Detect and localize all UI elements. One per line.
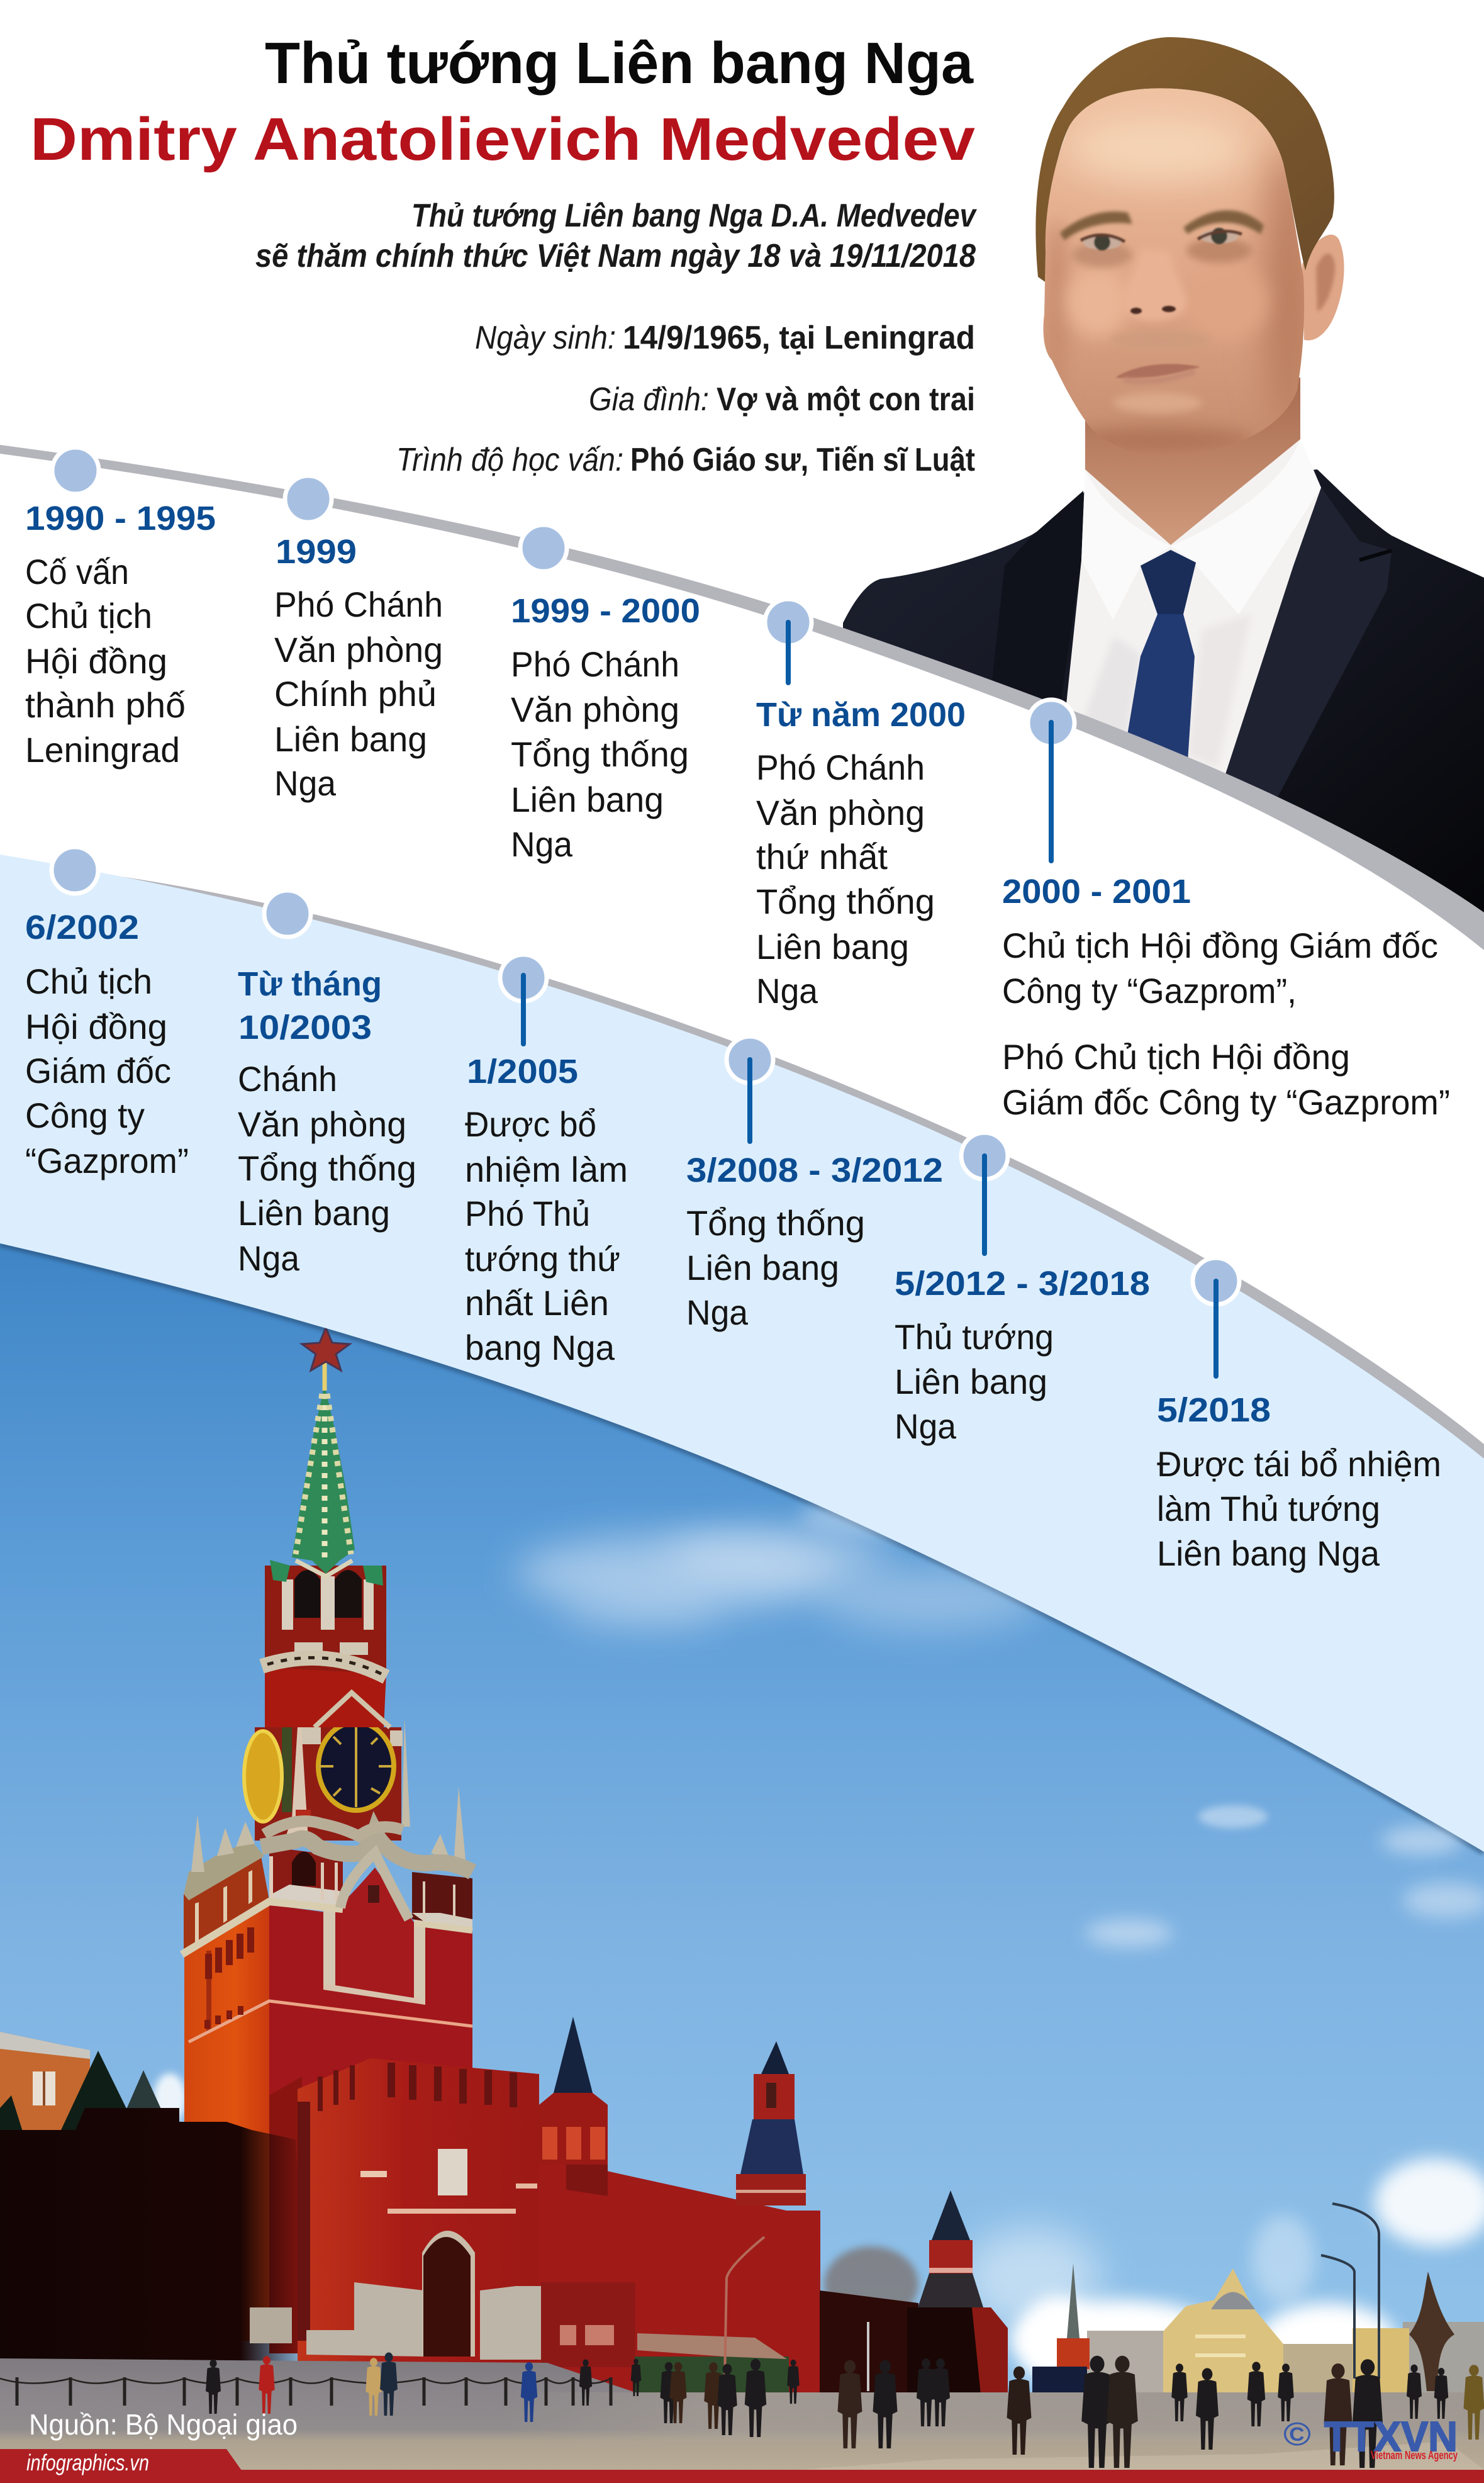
- timeline item 5/2012-3/2018: [895, 1265, 1150, 1446]
- biography facts: 14/9/1965, tại Leningrad: [623, 320, 975, 356]
- timeline item 6/2002: [25, 909, 189, 1180]
- title: Thủ tướng Liên bang Nga: [265, 30, 974, 96]
- timeline item 1999-2000: Nga: [511, 824, 573, 864]
- timeline item 1/2005: 1/2005: [467, 1053, 578, 1090]
- timeline item 1999: Liên bang: [274, 719, 427, 759]
- stone ogee band: [261, 1832, 472, 1872]
- timeline item from 2000: Văn phòng: [756, 793, 925, 832]
- TTXVN logo: ©: [1283, 2416, 1311, 2453]
- timeline item 10/2003: Liên bang: [238, 1193, 390, 1233]
- website label: infographics.vn: [26, 2450, 149, 2475]
- timeline item 1999-2000: Phó Chánh: [511, 644, 679, 684]
- third Kremlin tower: [736, 2041, 806, 2206]
- mausoleum: [635, 2357, 789, 2394]
- curve shadow: [0, 1243, 1484, 1852]
- belfry: [265, 1566, 386, 1674]
- timeline item 2000-2001: 2000 - 2001: [1002, 873, 1191, 911]
- distant city buildings: [1032, 2263, 1484, 2408]
- timeline item 1990-1995: Hội đồng: [25, 641, 167, 681]
- TTXVN logo: TTXVN: [1324, 2413, 1458, 2460]
- timeline item 1/2005: nhất Liên: [465, 1283, 609, 1323]
- timeline item 2000-2001: Chủ tịch Hội đồng Giám đốc: [1002, 926, 1438, 965]
- timeline item 1999: [274, 533, 443, 803]
- timeline item 5/2018: [1157, 1391, 1441, 1573]
- posts and arched panel: [323, 1907, 335, 1987]
- timeline item from 2000: Từ năm 2000: [756, 696, 966, 734]
- timeline item from 2000: Nga: [756, 971, 818, 1011]
- timeline item 2000-2001: Phó Chủ tịch Hội đồng: [1002, 1037, 1350, 1077]
- right ear: [1302, 235, 1344, 340]
- timeline item 10/2003: Từ tháng: [238, 965, 382, 1003]
- biography facts: Phó Giáo sư, Tiến sĩ Luật: [630, 442, 975, 478]
- face: [1043, 88, 1304, 456]
- timeline item 1990-1995: 1990 - 1995: [25, 500, 216, 537]
- hair: [1035, 37, 1334, 283]
- timeline item 5/2018: Được tái bổ nhiệm: [1157, 1444, 1441, 1484]
- right arcade: [412, 1872, 472, 1921]
- timeline item 1999: 1999: [276, 533, 357, 571]
- timeline item from 2000: [756, 696, 966, 1011]
- finial and star: [322, 1359, 327, 1391]
- annex: [541, 2282, 635, 2367]
- dark shadowed wall and trees on the left: [0, 2108, 308, 2366]
- gate arch: [422, 2231, 475, 2357]
- timeline item 1990-1995: Chủ tịch: [25, 596, 152, 636]
- second Kremlin tower: [539, 2017, 608, 2196]
- shirt: [1057, 439, 1321, 799]
- small stone pinnacles: [191, 1718, 466, 1872]
- timeline item 6/2002: Giám đốc: [25, 1051, 171, 1090]
- gold clock face: [244, 1731, 282, 1822]
- timeline item 1999-2000: Tổng thống: [511, 734, 689, 774]
- timeline item 6/2002: “Gazprom”: [25, 1141, 189, 1180]
- suit jacket: [843, 469, 1484, 1007]
- timeline item 1/2005: bang Nga: [465, 1328, 615, 1367]
- timeline item 10/2003: Văn phòng: [238, 1104, 406, 1144]
- timeline item 1999-2000: 1999 - 2000: [511, 592, 700, 630]
- timeline item 1990-1995: Leningrad: [25, 730, 180, 770]
- timeline item 6/2002: Công ty: [25, 1096, 145, 1135]
- collar: [1081, 469, 1171, 620]
- timeline item 2000-2001: [1002, 873, 1450, 1122]
- timeline item 1990-1995: [25, 500, 216, 770]
- subtitle: sẽ thăm chính thức Việt Nam ngày 18 và 19/11/2018: [255, 238, 976, 274]
- sky: [0, 1243, 1484, 2414]
- timeline item 5/2018: làm Thủ tướng: [1157, 1489, 1380, 1528]
- timeline item 1/2005: tướng thứ: [465, 1239, 620, 1279]
- timeline item 1990-1995: thành phố: [25, 685, 186, 725]
- source note: Nguồn: Bộ Ngoại giao: [29, 2408, 298, 2441]
- timeline item 6/2002: Chủ tịch: [25, 961, 152, 1001]
- cornice band: [262, 1658, 386, 1677]
- red Kremlin wall: [250, 2058, 820, 2397]
- Spasskaya tower: [182, 1328, 472, 2353]
- red drum: [265, 1661, 386, 1727]
- timeline item 10/2003: Nga: [238, 1238, 300, 1278]
- pale blue timeline area: [0, 855, 1484, 2483]
- clouds: [516, 1498, 1484, 1947]
- horizon clouds: [153, 2073, 1484, 2385]
- timeline item from 2000: Tổng thống: [756, 882, 935, 921]
- biography facts: Gia đình:: [589, 381, 709, 418]
- timeline item 5/2012-3/2018: 5/2012 - 3/2018: [895, 1265, 1150, 1303]
- timeline item 1/2005: [465, 1053, 628, 1367]
- fence posts and chain: [0, 2377, 611, 2406]
- timeline item 10/2003: 10/2003: [238, 1009, 372, 1046]
- eyebrows: [1060, 211, 1132, 240]
- biography facts: Trình độ học vấn:: [396, 442, 623, 478]
- timeline item 3/2008-3/2012: Liên bang: [686, 1248, 839, 1287]
- timeline item 1/2005: Phó Thủ: [465, 1194, 590, 1233]
- title: [30, 30, 975, 173]
- portrait photo of Medvedev: [843, 37, 1484, 1007]
- timeline item 1999-2000: Liên bang: [511, 780, 664, 819]
- fir trees: [0, 2051, 161, 2130]
- ground: [0, 2358, 1484, 2473]
- stone plinth: [306, 2282, 424, 2357]
- timeline item 1990-1995: Cố vấn: [25, 552, 129, 591]
- gate plaque: [438, 2149, 467, 2195]
- timeline item 1/2005: Được bổ: [465, 1104, 596, 1144]
- biography facts: [396, 320, 975, 478]
- timeline item 3/2008-3/2012: Nga: [686, 1292, 749, 1332]
- timeline item 2000-2001: Giám đốc Công ty “Gazprom”: [1002, 1082, 1450, 1122]
- timeline item 1999: Nga: [274, 763, 337, 803]
- left cornice: [182, 1902, 343, 1954]
- grey lower arc band: [75, 870, 1484, 1510]
- timeline markers: [52, 447, 1239, 1376]
- timeline item 10/2003: Chánh: [238, 1059, 337, 1099]
- Moscow Kremlin photo: [0, 1243, 1484, 2473]
- timeline item 3/2008-3/2012: [686, 1152, 943, 1332]
- timeline item 5/2012-3/2018: Liên bang: [895, 1362, 1047, 1401]
- timeline item from 2000: thứ nhất: [756, 837, 888, 877]
- timeline item 5/2012-3/2018: Nga: [895, 1406, 957, 1446]
- neck: [1085, 378, 1300, 545]
- timeline item 1999: Phó Chánh: [274, 585, 443, 624]
- biography facts: Ngày sinh:: [475, 320, 616, 356]
- timeline item 5/2018: 5/2018: [1157, 1391, 1271, 1429]
- tie: [1126, 550, 1196, 780]
- timeline item 6/2002: 6/2002: [25, 909, 139, 946]
- timeline item 1999: Văn phòng: [274, 630, 443, 670]
- mouth: [1115, 364, 1200, 378]
- title: Dmitry Anatolievich Medvedev: [30, 106, 975, 173]
- timeline item 10/2003: Tổng thống: [238, 1148, 416, 1188]
- main tower body: [184, 1905, 269, 2341]
- black clock face: [318, 1722, 394, 1810]
- street lamps: [725, 2204, 1379, 2391]
- timeline item 1/2005: nhiệm làm: [465, 1150, 628, 1189]
- green roof corners: [270, 1560, 290, 1582]
- timeline item from 2000: Phó Chánh: [756, 748, 925, 787]
- timeline item 1999: Chính phủ: [274, 674, 437, 714]
- timeline item 2000-2001: Công ty “Gazprom”,: [1002, 971, 1297, 1011]
- subtitle: [255, 198, 978, 274]
- clock stage: [255, 1727, 401, 1841]
- nose: [1122, 249, 1188, 321]
- bottom red bar: [0, 2470, 1484, 2483]
- pedestrians: [206, 2353, 1484, 2468]
- eyes: [1081, 228, 1242, 250]
- subtitle: Thủ tướng Liên bang Nga D.A. Medvedev: [411, 198, 978, 234]
- timeline item from 2000: Liên bang: [756, 927, 909, 967]
- timeline item 3/2008-3/2012: Tổng thống: [686, 1203, 865, 1243]
- biography facts: Vợ và một con trai: [717, 381, 975, 418]
- timeline item 5/2018: Liên bang Nga: [1157, 1533, 1380, 1573]
- timeline item 5/2012-3/2018: Thủ tướng: [895, 1317, 1054, 1357]
- left building: [0, 2032, 90, 2130]
- timeline item 1999-2000: Văn phòng: [511, 690, 679, 729]
- left-of-panel arcade: [269, 1847, 343, 1907]
- left arcade: [184, 1856, 269, 1954]
- red label tab: [0, 2449, 242, 2470]
- green spire: [292, 1385, 355, 1574]
- timeline item 6/2002: Hội đồng: [25, 1007, 167, 1046]
- timeline item 10/2003: [238, 965, 416, 1278]
- fourth tower and bare trees: [820, 2190, 1008, 2401]
- timeline item 1999-2000: [511, 592, 700, 864]
- timeline item 3/2008-3/2012: 3/2008 - 3/2012: [686, 1152, 943, 1189]
